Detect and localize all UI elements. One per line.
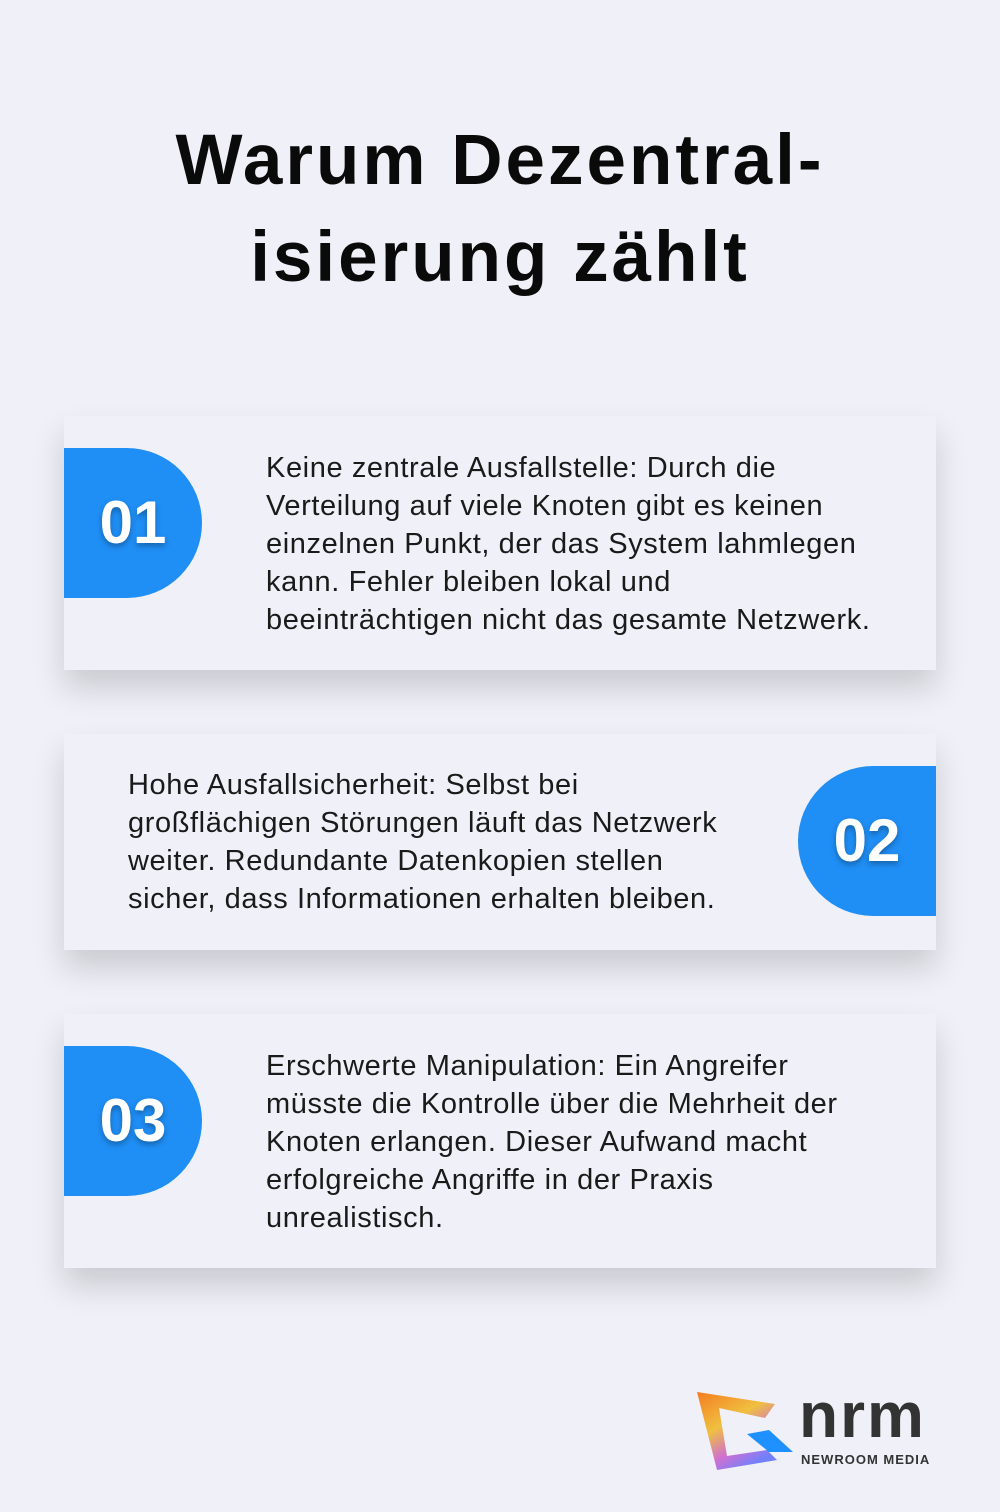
text 3 bbox=[266, 1050, 838, 1234]
text 1: kann. Fehler bleiben lokal und bbox=[266, 566, 671, 598]
badge 03 bbox=[64, 1046, 202, 1196]
icon: logo mark bbox=[697, 1392, 793, 1470]
text 1: Verteilung auf viele Knoten gibt es keinen bbox=[266, 490, 823, 522]
text 3: unrealistisch. bbox=[266, 1202, 444, 1234]
badge 03: 03 bbox=[100, 1087, 166, 1154]
badge 02: 02 bbox=[834, 807, 900, 874]
text 2 bbox=[128, 769, 717, 915]
title: isierung zählt bbox=[250, 218, 750, 297]
logo text: nrm bbox=[799, 1379, 926, 1451]
text 3: Knoten erlangen. Dieser Aufwand macht bbox=[266, 1126, 807, 1158]
text 2: Hohe Ausfallsicherheit: Selbst bei bbox=[128, 769, 579, 801]
badge 01 bbox=[64, 448, 202, 598]
panel: card 3 bbox=[64, 1014, 936, 1268]
text 2: großflächigen Störungen läuft das Netzwerk bbox=[128, 807, 717, 839]
title: Warum Dezentral- bbox=[176, 121, 824, 200]
text 1 bbox=[266, 452, 870, 636]
logo bbox=[697, 1379, 930, 1470]
badge 01: 01 bbox=[100, 489, 166, 556]
text 3: erfolgreiche Angriffe in der Praxis bbox=[266, 1164, 714, 1196]
text 1: einzelnen Punkt, der das System lahmlegen bbox=[266, 528, 856, 560]
text 2: sicher, dass Informationen erhalten bleiben. bbox=[128, 883, 715, 915]
panel: card 2 bbox=[64, 734, 936, 950]
panel: card 1 bbox=[64, 416, 936, 670]
text 3: Erschwerte Manipulation: Ein Angreifer bbox=[266, 1050, 788, 1082]
badge 02 bbox=[798, 766, 936, 916]
text 1: Keine zentrale Ausfallstelle: Durch die bbox=[266, 452, 776, 484]
logo: NEWROOM MEDIA bbox=[801, 1452, 930, 1467]
text 2: weiter. Redundante Datenkopien stellen bbox=[128, 845, 663, 877]
text 3: müsste die Kontrolle über die Mehrheit der bbox=[266, 1088, 838, 1120]
text 1: beeinträchtigen nicht das gesamte Netzwerk. bbox=[266, 604, 870, 636]
title bbox=[176, 121, 824, 297]
